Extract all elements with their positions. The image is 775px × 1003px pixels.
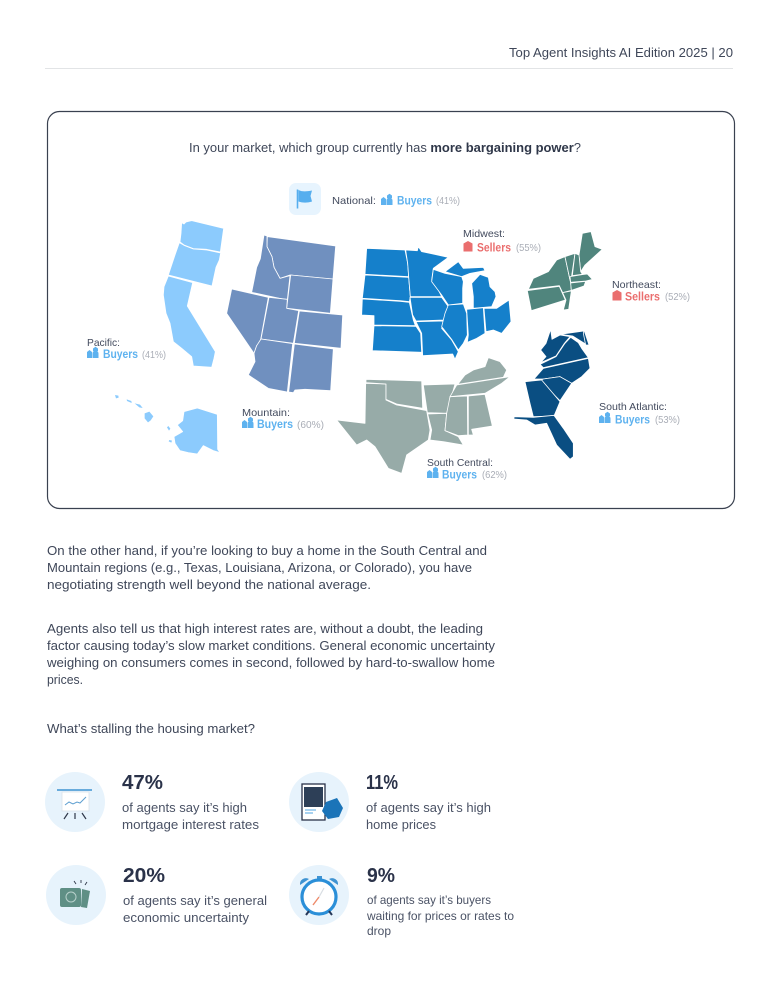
northeast label: Northeast: [612, 279, 661, 291]
northeast label: (52%) [665, 291, 690, 303]
panel: bargaining power map [48, 112, 734, 508]
stat: 47 percent: 47% [122, 772, 163, 794]
pacific label: Pacific: [87, 337, 120, 349]
mountain label [242, 407, 324, 431]
stat: 9 percent: waiting for prices or rates to [366, 909, 514, 923]
south central label: South Central: [427, 457, 493, 469]
mountain label: (60%) [297, 419, 324, 431]
stat: 20 percent [46, 865, 267, 925]
northeast label: Sellers [625, 292, 660, 304]
panel heading: In your market, which group currently has more bargaining power? [189, 140, 581, 155]
national label: National: [332, 195, 376, 207]
mountain label: Mountain: [242, 407, 290, 419]
stat: 47 percent [45, 772, 259, 832]
south central label: (62%) [482, 469, 507, 481]
mountain label: Buyers [257, 419, 293, 431]
map: midwest region [362, 247, 511, 359]
stat: 11 percent [289, 772, 491, 832]
stat: 11 percent: 11% [366, 772, 398, 794]
map: pacific region [115, 221, 224, 454]
south atlantic label: Buyers [615, 414, 650, 426]
midwest label [463, 228, 541, 254]
map: south central region [337, 358, 510, 473]
map: south atlantic region [514, 329, 590, 459]
stat: 20 percent: 20% [123, 865, 165, 887]
midwest label: (55%) [516, 242, 541, 254]
northeast label [612, 279, 690, 304]
national label [332, 194, 460, 208]
midwest label: Midwest: [463, 228, 505, 240]
icon: national flag [289, 183, 321, 215]
stat: 20 percent: of agents say it’s general [123, 894, 267, 908]
page header: Top Agent Insights AI Edition 2025 | 20 [509, 45, 733, 60]
section heading: What’s stalling the housing market? [47, 722, 255, 736]
paragraph: interest rates [46, 622, 496, 687]
stat: 9 percent: 9% [367, 865, 395, 887]
stat: 11 percent: home prices [366, 818, 436, 832]
national label: (41%) [436, 195, 460, 207]
paragraph: negotiating strength: On the other hand, if you’re looking to buy a home in the South Central and [47, 544, 487, 558]
stat: 11 percent: of agents say it’s high [366, 801, 491, 815]
south central label [427, 457, 507, 482]
pacific label [87, 337, 166, 361]
icon: alarm clock [289, 865, 349, 925]
paragraph: interest rates: prices. [47, 673, 83, 687]
south central label: Buyers [442, 470, 477, 482]
south atlantic label: (53%) [655, 414, 680, 426]
stat: 9 percent: of agents say it’s buyers [367, 893, 491, 907]
paragraph: interest rates: Agents also tell us that high interest rates are, without a doubt, the leading [47, 622, 483, 636]
stat: 47 percent: mortgage interest rates [122, 818, 259, 832]
pacific label: Buyers [103, 349, 138, 361]
south atlantic label [599, 401, 680, 426]
pacific label: (41%) [142, 349, 166, 361]
paragraph: negotiating strength: negotiating strength well beyond the national average. [47, 578, 371, 592]
icon: cash stack [46, 865, 106, 925]
paragraph: interest rates: weighing on consumers comes in second, followed by hard-to-swallow home [46, 656, 495, 670]
stat: 47 percent: of agents say it’s high [122, 801, 247, 815]
midwest label: Sellers [477, 242, 511, 254]
south atlantic label: South Atlantic: [599, 401, 667, 413]
stat: 9 percent: drop [367, 924, 391, 938]
stat: 9 percent [289, 865, 514, 938]
map: mountain region [227, 235, 343, 393]
map: northeast region [527, 232, 602, 311]
paragraph: negotiating strength [47, 544, 487, 592]
paragraph: interest rates: factor causing today’s slow market conditions. General economic uncertainty [47, 639, 496, 653]
paragraph: negotiating strength: Mountain regions (e.g., Texas, Louisiana, Arizona, or Colorado), you have [47, 561, 472, 575]
icon: document and house [289, 772, 349, 832]
stat: 20 percent: economic uncertainty [123, 911, 250, 925]
national label: Buyers [397, 196, 432, 208]
icon: presentation board [45, 772, 105, 832]
